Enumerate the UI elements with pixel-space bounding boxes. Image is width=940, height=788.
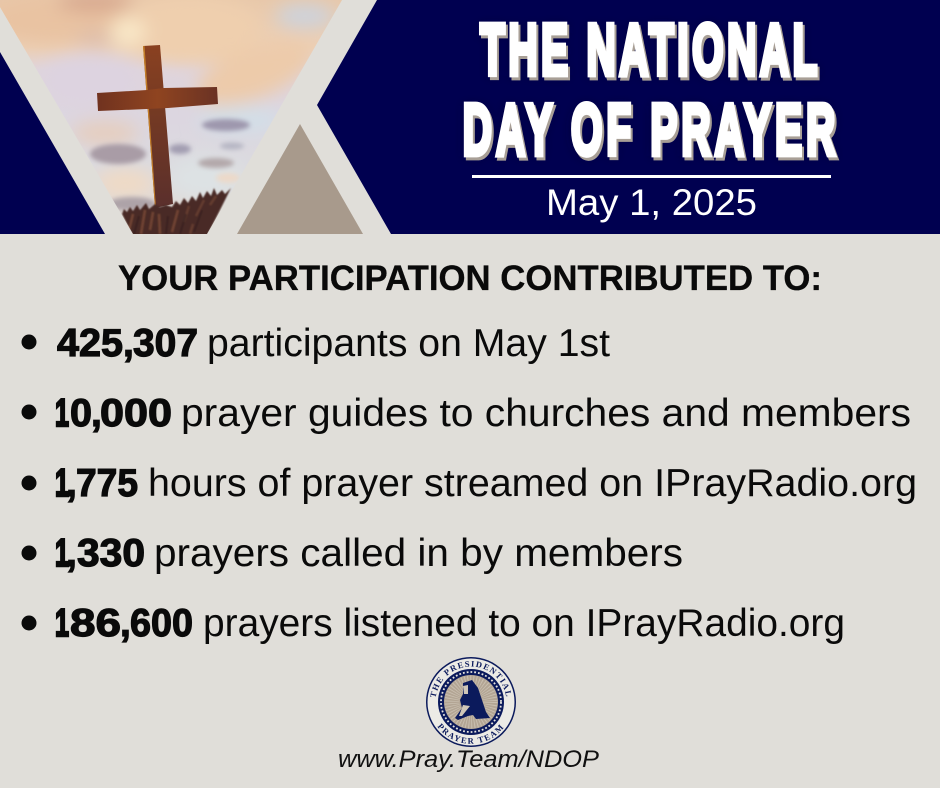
heading: YOUR PARTICIPATION CONTRIBUTED TO: xyxy=(118,259,822,298)
stat: prayers listened to: , xyxy=(120,602,131,645)
stat: prayer guides: 1 xyxy=(55,392,69,435)
stat: prayer guides: 000 xyxy=(100,392,172,435)
title: THE NATIONAL xyxy=(482,13,823,94)
stat: participants: 307 xyxy=(133,322,198,365)
heather on hill xyxy=(122,188,231,236)
stat: hours streamed: 1 xyxy=(55,462,69,505)
cross xyxy=(97,45,218,208)
stat: participants: , xyxy=(123,322,134,365)
photo: cross at sunset xyxy=(0,0,345,236)
kneeling figure xyxy=(455,680,490,720)
stat: prayers called in: prayers called in by members xyxy=(154,532,683,575)
title: DAY OF PRAYER xyxy=(465,93,841,174)
navy triangle left xyxy=(0,52,105,234)
title xyxy=(463,10,841,174)
stat: participants: 425 xyxy=(57,322,123,365)
stat: prayer guides: 0 xyxy=(70,392,92,435)
title rule xyxy=(472,175,831,178)
seal: The Presidential Prayer Team xyxy=(426,657,516,747)
date: May 1, 2025 xyxy=(546,182,757,223)
header banner xyxy=(0,0,940,236)
geometric light band xyxy=(0,0,391,234)
stat: prayers listened to: 86 xyxy=(70,602,121,645)
title: THE NATIONAL xyxy=(480,12,821,92)
stat: participants xyxy=(22,322,610,365)
title: DAY OF PRAYER xyxy=(463,92,839,172)
stat: hours streamed: , xyxy=(66,462,77,505)
stat: prayer guides: , xyxy=(91,392,102,435)
stat: prayers called in: 330 xyxy=(77,532,145,575)
website url: www.Pray.Team/NDOP xyxy=(338,746,599,773)
stat: hours streamed: 775 xyxy=(76,462,138,505)
stat: participants: participants on May 1st xyxy=(207,322,610,365)
stats list xyxy=(22,322,917,645)
seal: The Presidential Prayer Team: THE PRESIDENTIAL xyxy=(430,661,512,697)
stat: prayers called in: 1 xyxy=(55,532,69,575)
seal: The Presidential Prayer Team: PRAYER TEAM xyxy=(437,723,504,744)
stat: prayers called in: , xyxy=(66,532,77,575)
title: THE NATIONAL xyxy=(480,10,821,91)
stat: prayers listened to: prayers listened to on IPrayRadio.org xyxy=(203,602,845,645)
title: DAY OF PRAYER xyxy=(463,90,839,171)
stat: prayers listened to: 1 xyxy=(55,602,69,645)
stat: prayer guides: prayer guides to churches and members xyxy=(181,392,911,435)
taupe triangle xyxy=(237,124,363,234)
stat: hours streamed: hours of prayer streamed on IPrayRadio.org xyxy=(148,462,917,505)
stat: prayers listened to: 600 xyxy=(130,602,193,645)
